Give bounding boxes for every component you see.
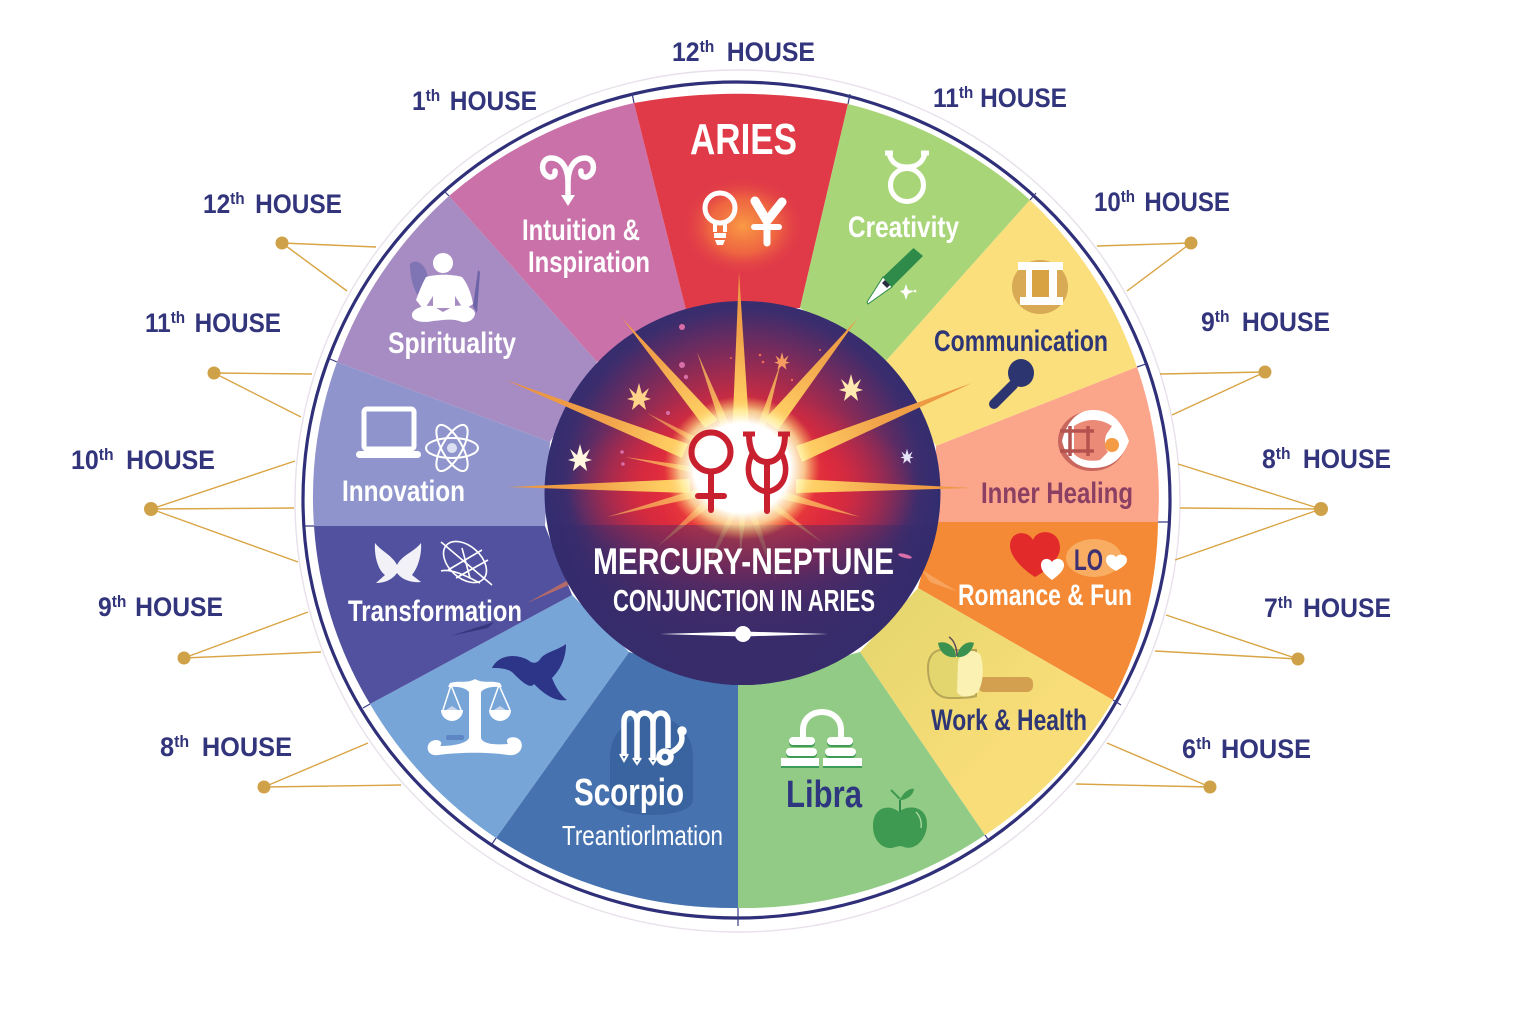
icon: libra sign bbox=[781, 712, 862, 768]
leader: right 7th bbox=[1155, 615, 1304, 666]
text: libra: Libra bbox=[786, 774, 863, 816]
label: 7th house right: th bbox=[1278, 593, 1292, 612]
panel: spirituality bbox=[337, 196, 597, 442]
lower dark band bbox=[540, 525, 945, 690]
label: 9th house left: HOUSE bbox=[128, 592, 223, 622]
central burst disc bbox=[506, 272, 972, 690]
label: 11th house left: 11 bbox=[145, 308, 174, 338]
label: 7th house right: 7 bbox=[1264, 593, 1279, 623]
label: 11th house top right: HOUSE bbox=[973, 83, 1067, 113]
icon: butterfly bbox=[375, 543, 421, 583]
panel: innovation bbox=[313, 362, 550, 526]
panel: aries bbox=[634, 94, 848, 310]
label: 12th house left: th bbox=[230, 189, 245, 208]
panel: romance and fun bbox=[918, 522, 1158, 700]
panel: work and health bbox=[860, 588, 1113, 835]
text: inner healing: Inner Healing bbox=[981, 477, 1133, 510]
label: 6th house right: th bbox=[1196, 734, 1211, 753]
label: 8th house left: 8 bbox=[160, 732, 175, 762]
label: 9th house right: 9 bbox=[1201, 307, 1216, 337]
panel: transformation bbox=[314, 526, 593, 704]
white core glow bbox=[664, 396, 820, 540]
icon: balance scales bbox=[428, 679, 522, 755]
label: 8th house right: 8 bbox=[1262, 444, 1277, 474]
heading: aries: ARIES bbox=[690, 115, 797, 164]
label: 10th house right: HOUSE bbox=[1138, 187, 1230, 217]
label: 10th house left: 10 bbox=[71, 445, 101, 475]
label: 12th house left: 12 bbox=[203, 189, 233, 219]
label: 9th house right: HOUSE bbox=[1235, 307, 1330, 337]
icon: green apple bbox=[873, 789, 927, 848]
icon: healing emblem bbox=[1058, 410, 1129, 471]
label: 9th house left: th bbox=[112, 592, 126, 611]
label: 10th house left: th bbox=[99, 445, 114, 464]
leader: left 10th bbox=[144, 461, 298, 562]
icon: laptop bbox=[356, 409, 421, 458]
leader: right 9th bbox=[1160, 366, 1272, 415]
icon: apple and mallet bbox=[928, 637, 1033, 698]
panel: inner healing bbox=[935, 367, 1159, 522]
label: 10th house right: 10 bbox=[1094, 187, 1124, 217]
icon: taurus sign bbox=[885, 153, 929, 202]
leader: upper right 10th bbox=[1097, 236, 1198, 291]
label: 9th house right: th bbox=[1215, 307, 1230, 326]
icon: white heart bbox=[1041, 559, 1064, 580]
panel: creativity bbox=[800, 104, 1030, 361]
icon: meditating figure bbox=[410, 253, 480, 322]
label: 11th house left: HOUSE bbox=[188, 308, 281, 338]
leader: left 11th bbox=[208, 366, 312, 417]
text: romance and fun: Romance & Fun bbox=[958, 579, 1132, 612]
label: top 12th house: th bbox=[700, 37, 714, 56]
icon: love badge bbox=[1066, 539, 1127, 577]
icon: microphone bbox=[994, 359, 1034, 404]
panel: communication bbox=[886, 200, 1137, 446]
label: 1th house: HOUSE bbox=[443, 86, 537, 116]
label: 8th house right: th bbox=[1276, 444, 1291, 463]
icon: red heart bbox=[1010, 532, 1060, 577]
text: innovation: Innovation bbox=[342, 475, 465, 508]
main title line: MERCURY-NEPTUNE bbox=[593, 541, 894, 582]
rays bbox=[506, 272, 972, 583]
icon: darker backdrop bbox=[610, 716, 693, 815]
label: 7th house right: HOUSE bbox=[1296, 593, 1391, 623]
leader: right 8th bbox=[1175, 464, 1328, 560]
label: 1th house: th bbox=[426, 86, 440, 105]
panel: libra bbox=[738, 652, 985, 908]
text: work and health: Work & Health bbox=[931, 704, 1087, 737]
label: 6th house right: HOUSE bbox=[1214, 734, 1311, 764]
stars bbox=[568, 324, 914, 560]
label: top 12th house: 12 bbox=[672, 37, 702, 67]
text: intuition: Intuition & bbox=[522, 214, 640, 247]
leader: upper left 12th bbox=[276, 236, 376, 291]
label: 8th house left: th bbox=[174, 732, 189, 751]
panel: scales bbox=[370, 595, 629, 838]
glyph: venus-mercury bbox=[692, 432, 730, 510]
panel: scorpio bbox=[496, 652, 738, 908]
panel: intuition and inspiration bbox=[449, 103, 686, 362]
divider with dot bbox=[660, 626, 828, 642]
label: 11th house left: th bbox=[171, 308, 185, 327]
label: 11th house top right: 11 bbox=[933, 83, 962, 113]
icon: bird bbox=[492, 644, 567, 700]
icon: scorpio sign bbox=[620, 713, 684, 764]
label: 6th house right: 6 bbox=[1182, 734, 1197, 764]
text: spirituality: Spirituality bbox=[388, 327, 516, 360]
glyph: neptune bbox=[743, 434, 790, 511]
label: 11th house top right: th bbox=[959, 83, 973, 102]
leader: left 8th bbox=[258, 743, 401, 794]
text: inspiration: Inspiration bbox=[528, 246, 650, 279]
leader: right 6th bbox=[1076, 743, 1216, 794]
label: 9th house left: 9 bbox=[98, 592, 113, 622]
leader: left 9th bbox=[178, 612, 321, 664]
icon: warm glow bbox=[681, 176, 805, 276]
label: 8th house left: HOUSE bbox=[195, 732, 292, 762]
label: 10th house left: HOUSE bbox=[119, 445, 215, 475]
label: 10th house right: th bbox=[1121, 187, 1135, 206]
icon: leaf globe bbox=[436, 533, 494, 591]
label: top 12th house: HOUSE bbox=[720, 37, 815, 67]
label: 8th house right: HOUSE bbox=[1296, 444, 1391, 474]
text: communication: Communication bbox=[934, 325, 1108, 358]
icon: gemini sign bbox=[1012, 260, 1068, 314]
outer ring: faint circle and navy band bbox=[295, 70, 1180, 932]
decoration streak bbox=[922, 570, 958, 592]
subtitle line: CONJUNCTION IN ARIES bbox=[613, 583, 875, 618]
text: garbled transformation caption: Treantiorlmation bbox=[562, 820, 723, 851]
label: 12th house left: HOUSE bbox=[248, 189, 342, 219]
icon: love badge: LO bbox=[1074, 544, 1103, 577]
icon: bulb glyph bbox=[705, 193, 735, 245]
icon: aries sign bbox=[543, 158, 593, 206]
text: scorpio: Scorpio bbox=[574, 772, 684, 814]
decoration streaks bbox=[450, 566, 593, 636]
icon: pen bbox=[867, 248, 923, 304]
text: creativity: Creativity bbox=[848, 211, 959, 244]
icon: atom bbox=[426, 420, 478, 476]
label: 1th house: 1 bbox=[412, 86, 427, 116]
text: transformation: Transformation bbox=[348, 595, 522, 628]
icon: y glyph bbox=[754, 201, 782, 243]
